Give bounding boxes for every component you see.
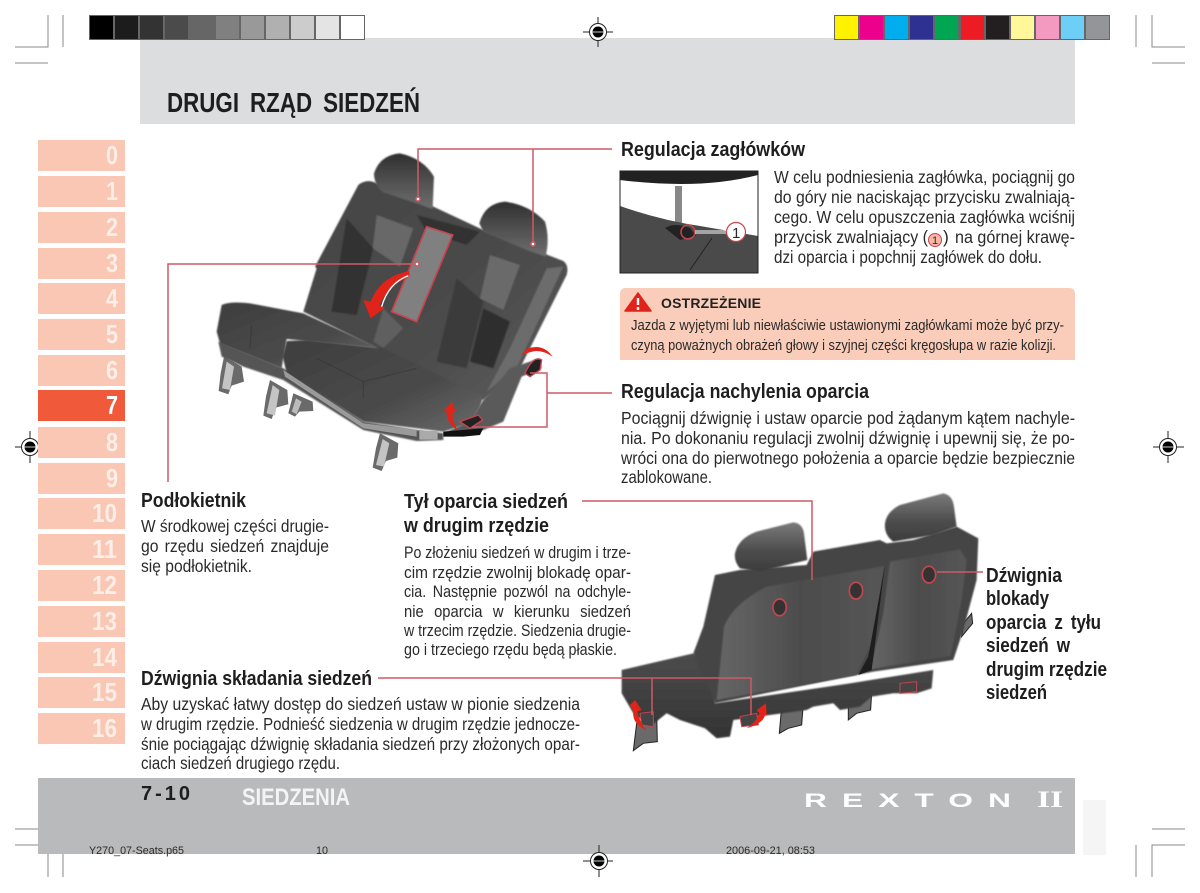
- text: armrest: się podłokietnik.: [141, 556, 252, 576]
- side bracket: [443, 358, 542, 433]
- faint page smudge: [1083, 800, 1106, 855]
- header band: [140, 38, 1075, 124]
- backrest upholstery shading: [332, 215, 563, 392]
- left headrest: [374, 153, 434, 209]
- text: rear of backrest: cim rzędzie zwolnij blokadę opar-: [404, 564, 631, 582]
- chapter index tabs: 5: [106, 319, 118, 349]
- print slug: Y270_07-Seats.p65: [89, 845, 184, 857]
- photo: headrest release button: 1: [732, 225, 740, 242]
- chapter index tabs: 10: [92, 498, 117, 528]
- print slug: 2006-09-21, 08:53: [726, 845, 815, 857]
- text: armrest: [141, 516, 329, 576]
- chapter index tabs: 4: [106, 283, 118, 313]
- warning box: czyną poważnych obrażeń głowy i szyjnej części kręgosłupa w razie kolizji.: [631, 338, 1056, 354]
- chapter index tabs: 14: [92, 642, 117, 672]
- armrest: [392, 227, 453, 322]
- registration mark left: [15, 431, 46, 463]
- logo: [804, 787, 1063, 812]
- rear right panel: [871, 549, 967, 669]
- text: headrest adjustment: na górnej krawę-: [955, 227, 1075, 247]
- rear seat gap: [858, 565, 885, 675]
- rear folding levers and arrows: [630, 682, 917, 731]
- right cushion: [283, 340, 483, 432]
- chapter index tabs: 11: [92, 534, 117, 564]
- text: headrest adjustment: przycisk zwalniający (: [774, 227, 928, 247]
- logo: II: [1037, 787, 1063, 812]
- cushion seams: [250, 325, 417, 398]
- rear cushion base: [622, 653, 933, 738]
- leader lines: seats rear view: [378, 501, 983, 715]
- logo: REXTON: [804, 791, 1026, 812]
- rear right headrest: [885, 493, 957, 542]
- illustration: seats front view: [217, 153, 567, 471]
- armrest arrow: [363, 271, 409, 318]
- illustration: seats rear view: [622, 493, 978, 751]
- text: headrest adjustment: ): [943, 227, 949, 247]
- text: recline adjustment: zablokowane.: [621, 467, 712, 487]
- heading: Dźwignia blokady oparcia: siedzeń w: [986, 634, 1070, 657]
- text: folding lever: śnie pociągając dźwignię składania siedzeń przy złożonych opar-: [141, 734, 580, 754]
- section name: SIEDZENIA: [242, 784, 350, 811]
- text: headrest adjustment: do góry nie naciskając przycisku zwalniają-: [774, 187, 1075, 207]
- registration mark right: [1153, 431, 1184, 463]
- heading: Tył oparcia siedzeń: [403, 490, 568, 537]
- greyscale calibration bar: [89, 15, 365, 40]
- text: rear of backrest: cia. Następnie pozwól na odchyle-: [404, 583, 631, 601]
- page number: 7-10: [141, 783, 190, 805]
- registration mark top: [583, 17, 613, 47]
- text: recline adjustment: Pociągnij dźwignię i ustaw oparcie pod żądanym kątem nachyle-: [621, 408, 1075, 428]
- title: DRUGI RZĄD SIEDZEŃ: [167, 87, 420, 118]
- heading: Dźwignia blokady oparcia: siedzeń: [986, 681, 1047, 704]
- footer band: [38, 778, 1075, 857]
- backrest: [303, 181, 567, 400]
- text: headrest adjustment: W celu podniesienia zagłówka, pociągnij go: [774, 167, 1075, 187]
- cushion underside: [218, 342, 443, 441]
- side lever: [525, 359, 542, 377]
- text: recline adjustment: [620, 408, 1075, 487]
- rear lock levers: [773, 566, 936, 616]
- text: rear of backrest: w trzecim rzędzie. Siedzenia drugie-: [403, 622, 631, 640]
- chapter index tabs: 3: [106, 248, 118, 278]
- warning box: Jazda z wyjętymi lub niewłaściwie ustawionymi zagłówkami może być przy-: [631, 318, 1064, 334]
- chapter index tabs: 15: [92, 677, 117, 707]
- cushion lever: [460, 415, 483, 428]
- text: folding lever: Aby uzyskać łatwy dostęp do siedzeń ustaw w pionie siedzenia: [141, 694, 580, 714]
- side lever arrow: [521, 347, 553, 357]
- warning box: [620, 288, 1075, 360]
- text: folding lever: w drugim rzędzie. Podnieść siedzenia w drugim rzędzie jednocze-: [140, 714, 580, 734]
- lower lever arrow: [443, 402, 458, 431]
- text: recline adjustment: nia. Po dokonaniu regulacji zwolnij dźwignię i upewnij się, że po-: [621, 428, 1075, 448]
- heading: Tył oparcia siedzeń: Tył oparcia siedzeń: [404, 490, 568, 513]
- chapter index tabs: 13: [92, 606, 117, 636]
- chapter index tabs: 1: [106, 176, 118, 206]
- text: rear of backrest: [403, 544, 631, 659]
- text: headrest adjustment: [774, 167, 1075, 267]
- heading: Regulacja nachylenia oparcia: Regulacja nachylenia oparcia: [621, 380, 870, 403]
- text: recline adjustment: wróci ona do pierwotnego położenia a oparcie będzie bezpiecznie: [620, 448, 1075, 468]
- heading: Dźwignia blokady oparcia: [986, 564, 1107, 704]
- heading: Dźwignia blokady oparcia: Dźwignia: [986, 564, 1063, 587]
- rear legs: [633, 613, 973, 751]
- text: headrest adjustment: dzi oparcia i popchnij zagłówek do dołu.: [774, 247, 1042, 267]
- icon: warning triangle: [625, 293, 651, 311]
- legs: [219, 357, 398, 471]
- text: headrest adjustment: 1: [932, 235, 938, 247]
- print slug: [89, 845, 815, 857]
- text: folding lever: [140, 694, 580, 773]
- text: armrest: go rzędu siedzeń znajduje: [141, 536, 329, 556]
- right headrest: [479, 202, 548, 257]
- left cushion: [217, 302, 380, 368]
- chapter index tabs: 12: [92, 570, 117, 600]
- text: headrest adjustment: cego. W celu opuszczenia zagłówka wciśnij: [774, 207, 1075, 227]
- rear left panel: [717, 566, 884, 700]
- text: folding lever: ciach siedzeń drugiego rzędu.: [141, 753, 340, 773]
- heading: Dźwignia blokady oparcia: drugim rzędzie: [986, 658, 1107, 681]
- text: rear of backrest: Po złożeniu siedzeń w drugim i trze-: [404, 544, 631, 562]
- heading: Tył oparcia siedzeń: w drugim rzędzie: [403, 514, 549, 537]
- photo: headrest release button: [620, 171, 758, 273]
- heading: Regulacja zagłówków: Regulacja zagłówków: [621, 138, 805, 161]
- leader lines: seats front view: [168, 149, 612, 482]
- chapter index tabs: 2: [106, 212, 118, 242]
- chapter index tabs: 8: [106, 427, 118, 457]
- rear shell: [693, 527, 978, 703]
- text: rear of backrest: nie oparcia w kierunku siedzeń: [404, 603, 631, 621]
- text: rear of backrest: go i trzeciego rzędu będą płaskie.: [404, 641, 617, 659]
- chapter index tabs: 0: [106, 140, 118, 170]
- text: armrest: W środkowej części drugie-: [141, 516, 329, 536]
- heading: Dźwignia blokady oparcia: oparcia z tyłu: [986, 611, 1101, 634]
- warning box: OSTRZEŻENIE: [661, 295, 761, 311]
- heading: Podłokietnik: Podłokietnik: [141, 489, 247, 512]
- heading: Dźwignia blokady oparcia: blokady: [986, 587, 1049, 610]
- chapter index tabs: [38, 140, 125, 744]
- chapter index tabs: 6: [106, 355, 118, 385]
- print slug: 10: [316, 845, 328, 857]
- rear left headrest: [735, 522, 807, 572]
- chapter index tabs: 9: [106, 463, 118, 493]
- heading: Dźwignia składania siedzeń: Dźwignia składania siedzeń: [141, 667, 372, 690]
- chapter index tabs: 7: [106, 390, 118, 420]
- registration mark bottom: [583, 845, 613, 877]
- chapter index tabs: 16: [92, 713, 117, 743]
- colour calibration bar: [834, 15, 1110, 40]
